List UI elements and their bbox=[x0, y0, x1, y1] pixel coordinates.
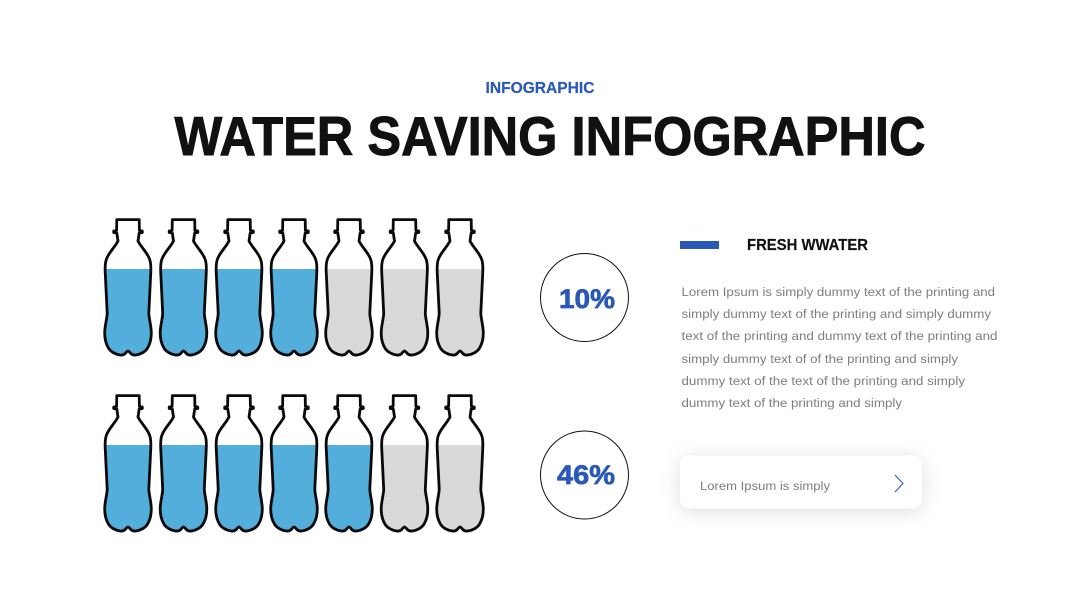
bottle 6 grey bbox=[381, 220, 428, 355]
body paragraph: text of the printing and dummy text of the printing and bbox=[682, 329, 998, 343]
icon: chevron arrow bbox=[895, 475, 903, 492]
body paragraph: dummy text of the text of the printing and simply bbox=[682, 374, 966, 388]
bottle 3 filled bbox=[216, 220, 262, 355]
bottle 4 filled bbox=[271, 396, 317, 531]
title: WATER SAVING INFOGRAPHIC bbox=[174, 105, 926, 167]
percent badge: 10% bbox=[540, 254, 628, 342]
percent badge: 10%: 10% bbox=[559, 284, 615, 314]
heading: fresh water: FRESH WWATER bbox=[747, 237, 868, 254]
bottle row: 10% bbox=[105, 220, 483, 355]
bottle 1 filled bbox=[105, 396, 151, 531]
bottle row: 46% bbox=[105, 396, 483, 531]
eyebrow label: INFOGRAPHIC bbox=[486, 80, 594, 97]
bottle 6 grey bbox=[381, 396, 428, 531]
body paragraph bbox=[682, 285, 998, 410]
bottle 7 grey bbox=[437, 220, 483, 355]
percent badge: 46% bbox=[540, 431, 628, 519]
button label: Lorem Ipsum is simply bbox=[700, 479, 831, 493]
percent badge: 46%: 46% bbox=[557, 460, 615, 490]
button card bbox=[680, 456, 922, 508]
bottle 7 grey bbox=[437, 396, 483, 531]
body paragraph: dummy text of the printing and simply bbox=[682, 396, 903, 410]
bottle 5 filled bbox=[326, 396, 372, 531]
accent bar bbox=[680, 241, 719, 249]
bottle 3 filled bbox=[216, 396, 262, 531]
bottle 5 grey bbox=[326, 220, 372, 355]
body paragraph: Lorem Ipsum is simply dummy text of the printing and bbox=[682, 285, 995, 299]
bottle 4 filled bbox=[271, 220, 317, 355]
body paragraph: simply dummy text of of the printing and simply bbox=[682, 352, 959, 366]
bottle 2 filled bbox=[160, 220, 207, 355]
bottle 1 filled bbox=[105, 220, 151, 355]
bottle 2 filled bbox=[160, 396, 207, 531]
body paragraph: simply dummy text of the printing and simply dummy bbox=[682, 307, 992, 321]
